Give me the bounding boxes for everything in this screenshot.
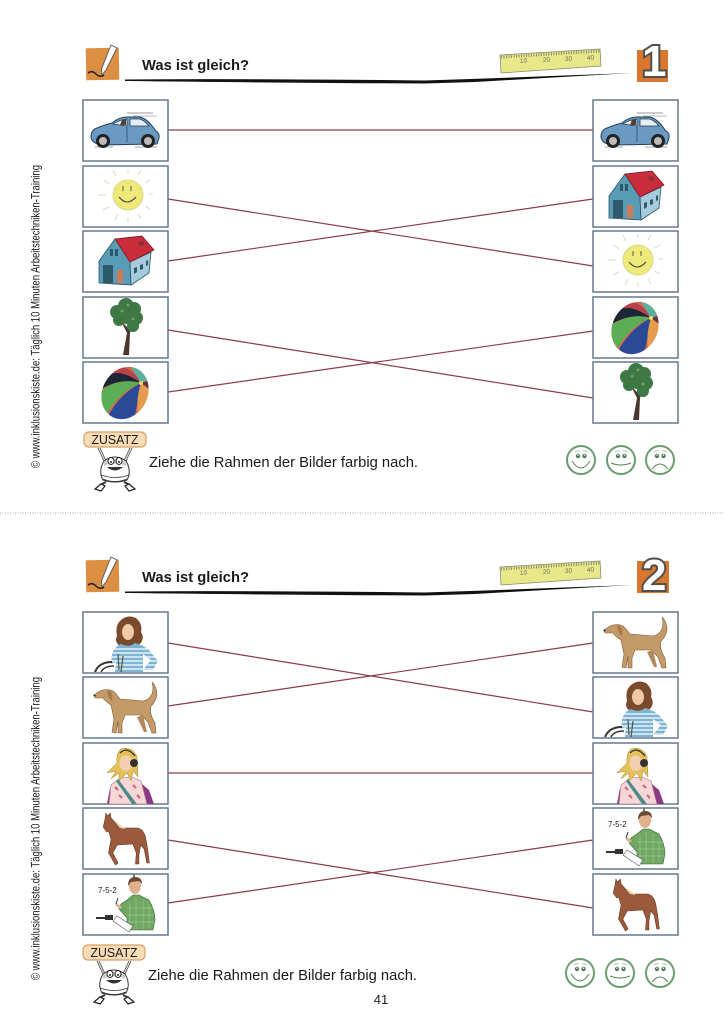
icon: monster — [95, 448, 135, 491]
smiley rating — [566, 959, 674, 987]
picture: girl right — [593, 743, 678, 804]
heading: Was ist gleich? — [142, 57, 249, 74]
picture: sun right — [593, 231, 678, 292]
icon: ruler: 10 — [520, 570, 528, 577]
zusatz badge: ZUSATZ — [92, 433, 139, 447]
picture: house left — [83, 231, 168, 292]
icon: ruler: 40 — [587, 55, 595, 62]
icon: monster — [94, 961, 134, 1004]
icon: pencil — [86, 45, 119, 80]
picture: ball right — [593, 297, 678, 359]
connecting lines — [168, 643, 593, 908]
picture: house right — [593, 166, 678, 227]
picture: man left — [83, 874, 168, 935]
picture: tree left — [83, 297, 168, 358]
picture: sun left — [83, 166, 168, 227]
picture: woman right — [593, 677, 678, 738]
brush underline — [125, 585, 632, 596]
icon: ruler — [500, 561, 601, 585]
panel: exercise 2 — [28, 551, 678, 1004]
icon: ruler: 30 — [565, 56, 573, 63]
picture: dog left — [83, 677, 168, 738]
picture: dog right — [593, 612, 678, 673]
panel: exercise 1 — [28, 37, 678, 491]
picture: car left — [83, 100, 168, 161]
picture: man right: 7-5-2 — [608, 820, 627, 829]
picture: man right — [593, 808, 678, 869]
instruction: Ziehe die Rahmen der Bilder farbig nach. — [148, 968, 417, 984]
copyright note: © www.inklusionskiste.de: Täglich 10 Minuten Arbeitstechniken-Training — [28, 677, 42, 980]
picture: woman left — [83, 612, 168, 673]
picture: horse left — [83, 808, 168, 869]
icon: ruler: 20 — [543, 569, 551, 576]
smiley rating — [567, 446, 674, 474]
picture: girl left — [83, 743, 168, 804]
picture: car right — [593, 100, 678, 161]
picture: ball left — [83, 362, 168, 424]
zusatz badge: ZUSATZ — [90, 946, 138, 960]
heading: Was ist gleich? — [142, 569, 249, 586]
icon: ruler: 10 — [520, 58, 528, 65]
icon: ruler: 30 — [565, 568, 573, 575]
picture: tree right — [593, 362, 678, 423]
icon: pencil — [86, 557, 119, 592]
icon: ruler: 40 — [587, 567, 595, 574]
picture: horse right — [593, 874, 678, 935]
connecting lines — [168, 130, 593, 398]
icon: ruler: 20 — [543, 57, 551, 64]
instruction: Ziehe die Rahmen der Bilder farbig nach. — [149, 455, 418, 471]
task number 2: 2 — [642, 551, 666, 600]
task number 1: 1 — [642, 37, 666, 86]
brush underline — [125, 73, 632, 84]
picture: man left: 7-5-2 — [98, 886, 117, 895]
copyright note: © www.inklusionskiste.de: Täglich 10 Minuten Arbeitstechniken-Training — [28, 165, 42, 468]
page number: 41 — [374, 992, 388, 1007]
icon: ruler — [500, 49, 601, 73]
